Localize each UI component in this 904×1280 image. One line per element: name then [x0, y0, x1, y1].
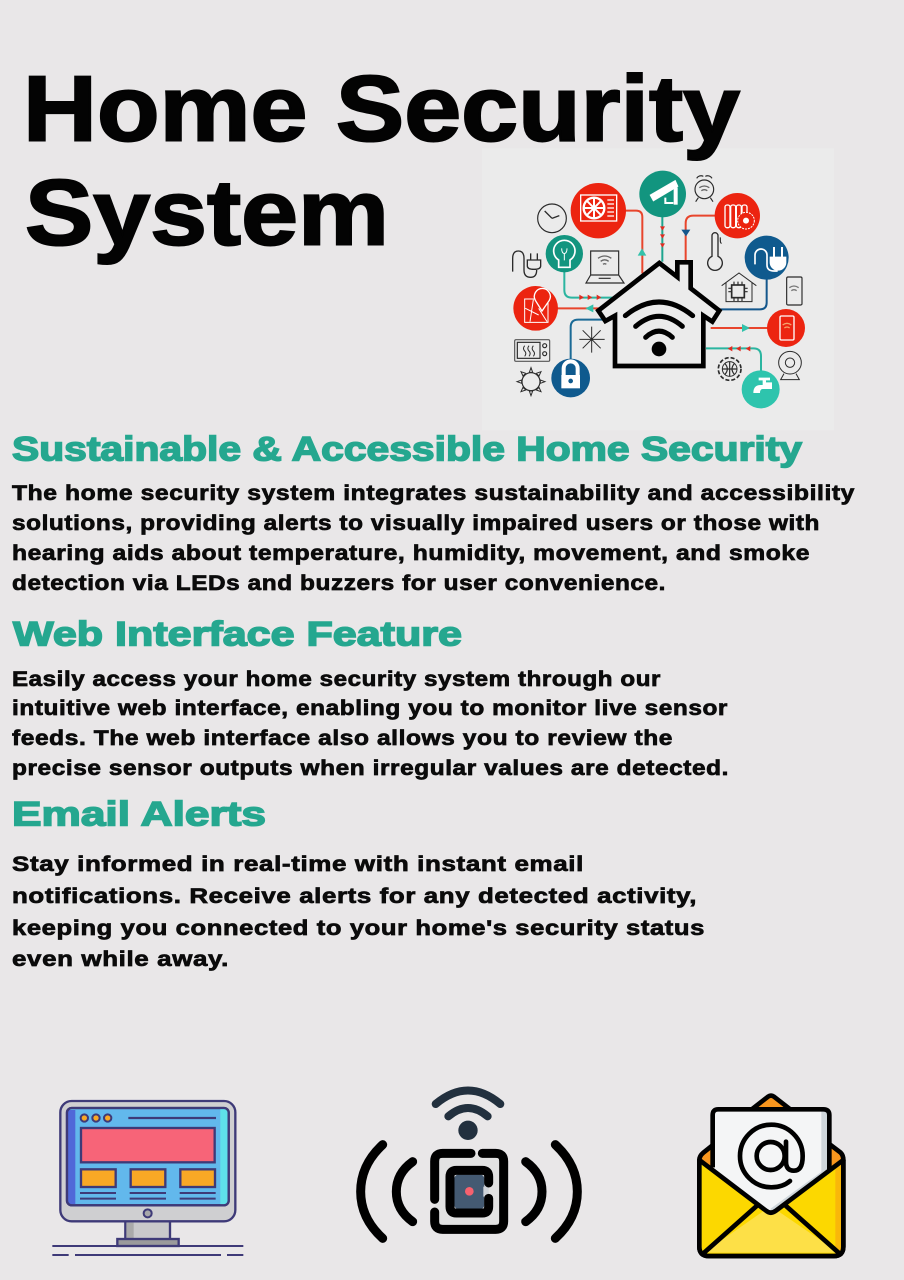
illustration: smart home network	[482, 148, 834, 430]
text block: web interface description: feeds. The web interface also allows you to review the	[12, 727, 673, 750]
title	[23, 56, 740, 264]
text block: sustainability description: detection via LEDs and buzzers for user convenience.	[12, 572, 666, 595]
outline glyphs	[513, 176, 802, 396]
title: Home Security	[23, 56, 740, 160]
icon: computer monitor	[52, 1101, 243, 1255]
house	[598, 262, 719, 366]
heading: sustainable and accessible home security: Sustainable & Accessible Home Security	[12, 430, 802, 468]
text block: sustainability description: hearing aids about temperature, humidity, movement, and smoke	[12, 542, 810, 565]
wifi signal	[625, 302, 693, 337]
text block: email alerts description	[12, 853, 705, 971]
icon: email envelope	[699, 1096, 843, 1256]
text block: web interface description	[12, 668, 729, 780]
title: System	[25, 160, 389, 264]
heading: email alerts: Email Alerts	[12, 796, 266, 834]
text block: sustainability description: solutions, providing alerts to visually impaired users or those with	[12, 512, 820, 535]
circles	[571, 183, 626, 238]
heading: web interface feature: Web Interface Feature	[13, 616, 462, 654]
text block: web interface description: Easily access your home security system through our	[12, 668, 661, 691]
icon: wireless sensor	[361, 1090, 577, 1238]
text block: email alerts description: notifications. Receive alerts for any detected activity,	[12, 885, 697, 908]
text block: sustainability description: The home security system integrates sustainability and accessibility	[12, 482, 855, 505]
arrows	[579, 226, 750, 351]
text block: email alerts description: Stay informed in real-time with instant email	[12, 853, 584, 876]
text block: email alerts description: even while away.	[12, 948, 229, 971]
circle glyphs	[525, 180, 794, 340]
text block: sustainability description	[12, 482, 855, 595]
text block: web interface description: intuitive web interface, enabling you to monitor live sensor	[12, 697, 728, 720]
text block: email alerts description: keeping you connected to your home's security status	[12, 917, 705, 940]
text block: web interface description: precise sensor outputs when irregular values are detected.	[12, 757, 729, 780]
